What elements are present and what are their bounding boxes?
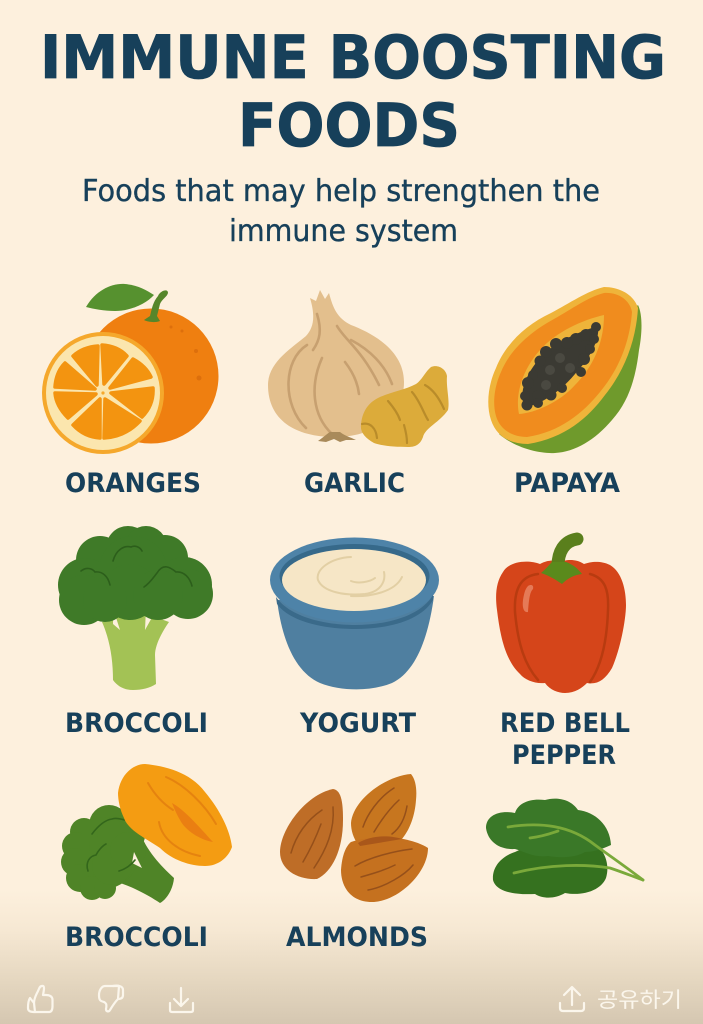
icon: papaya: [488, 287, 642, 453]
share label: 공유하기: [597, 989, 682, 1012]
title: [40, 23, 666, 161]
icon: almonds: [280, 774, 428, 902]
subtitle: [82, 174, 600, 249]
label: papaya: PAPAYA: [514, 468, 620, 499]
label: red bell pepper: PEPPER: [512, 740, 616, 771]
icon: red bell pepper: [496, 539, 626, 693]
icon: broccoli: [58, 526, 213, 690]
icon: download: [170, 988, 193, 1012]
label: broccoli: BROCCOLI: [65, 708, 208, 739]
icon: ginger: [361, 366, 449, 447]
label: almonds: ALMONDS: [286, 922, 428, 953]
label: yogurt: YOGURT: [299, 708, 416, 739]
icon: share: [560, 987, 584, 1011]
title: FOODS: [238, 91, 460, 161]
label: garlic: GARLIC: [304, 468, 405, 499]
icon: broccoli with orange fruit: [61, 764, 232, 903]
icon: thumbs up: [28, 986, 52, 1012]
label: oranges: ORANGES: [65, 468, 201, 499]
title: IMMUNE BOOSTING: [40, 23, 666, 93]
subtitle: Foods that may help strengthen the: [82, 174, 600, 209]
label: red bell pepper: RED BELL: [500, 708, 630, 739]
icon: yogurt bowl: [270, 538, 439, 689]
icon: orange: [42, 284, 218, 454]
subtitle: immune system: [229, 214, 458, 249]
icon: thumbs down: [99, 986, 123, 1011]
icon: spinach leaves: [486, 799, 643, 898]
label: broccoli 2: BROCCOLI: [65, 922, 208, 953]
icon: garlic: [268, 290, 404, 442]
label: red bell pepper: [500, 708, 630, 771]
